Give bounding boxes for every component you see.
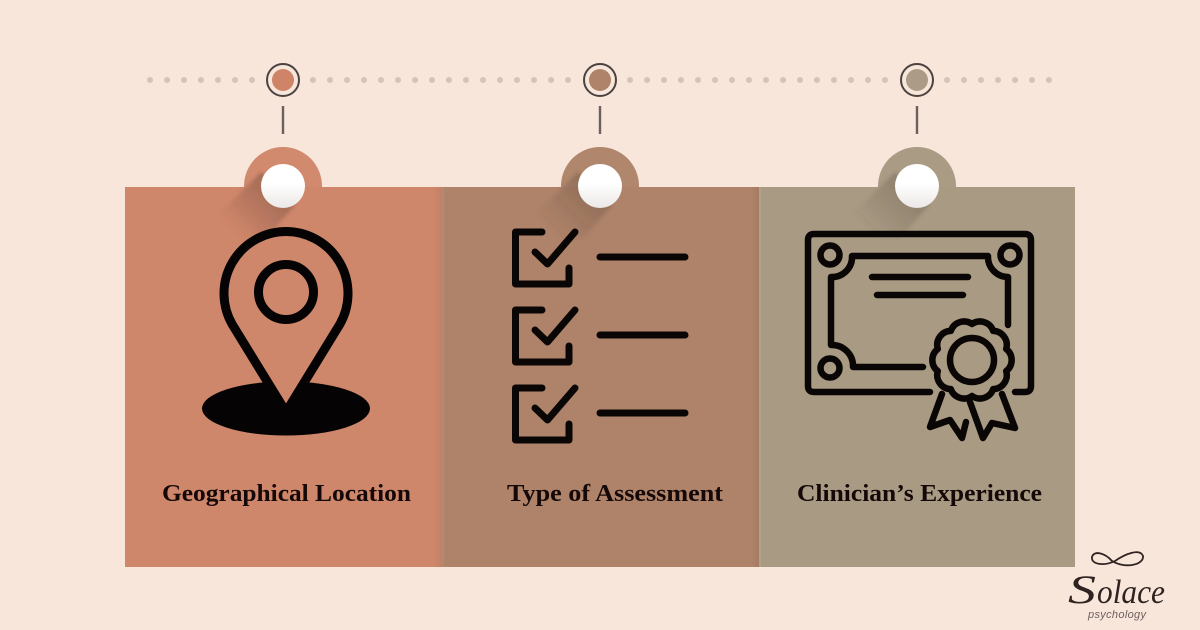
logo infinity mark (1092, 552, 1143, 565)
pin (261, 164, 305, 208)
logo wordmark: olace (1097, 574, 1165, 611)
logo: Solace psychology (1068, 552, 1165, 621)
pin (895, 164, 939, 208)
logo wordmark: S (1068, 567, 1096, 612)
logo tagline: psychology (1087, 609, 1148, 621)
icon: certificate with rosette (808, 234, 1031, 438)
marker 3 (901, 64, 933, 134)
label: Type of Assessment: Type of Assessment (507, 481, 723, 507)
marker 2 (584, 64, 616, 134)
label: Geographical Location: Geographical Location (162, 481, 411, 507)
timeline: dotted line with three markers (150, 64, 1050, 134)
label: Clinician's Experience: Clinician’s Experience (797, 481, 1042, 507)
panel: geographical location (125, 147, 442, 567)
panel: type of assessment (442, 147, 759, 567)
icon: map location pin (202, 232, 370, 436)
icon: checklist (516, 232, 685, 440)
panel: clinician's experience (759, 147, 1075, 567)
marker 1 (267, 64, 299, 134)
pin (578, 164, 622, 208)
